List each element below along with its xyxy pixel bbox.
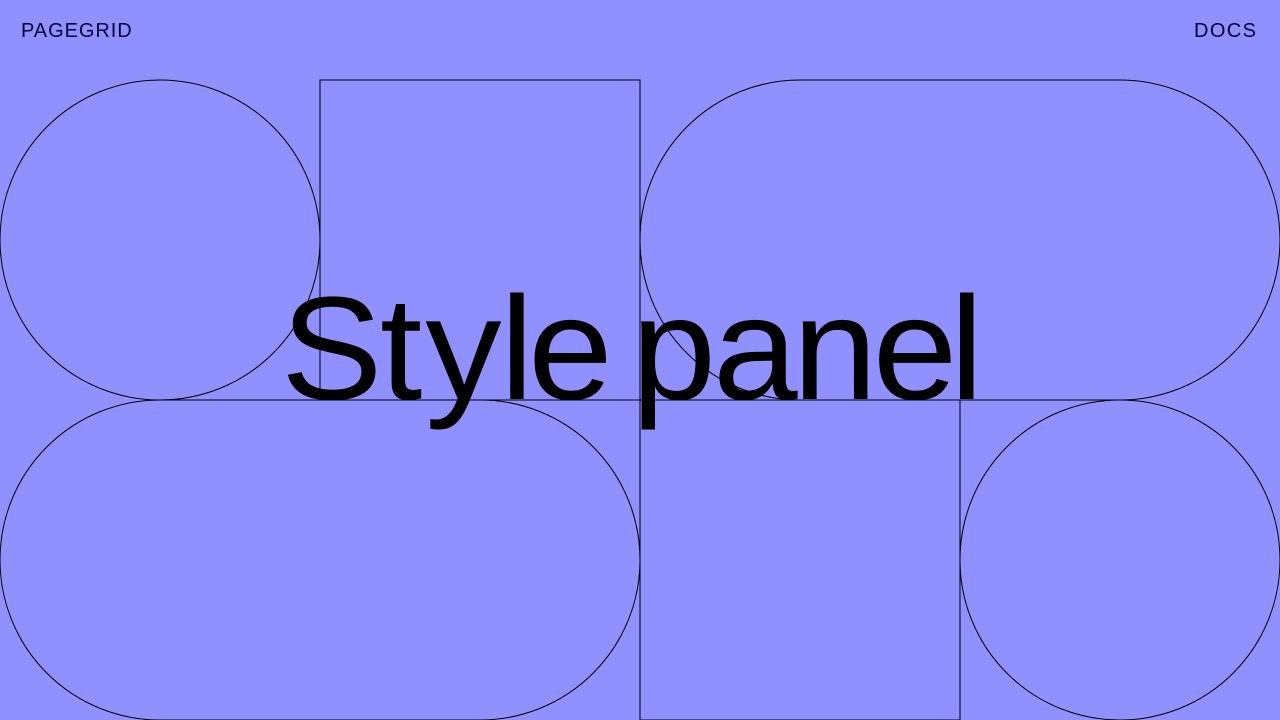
docs link: DOCS [1194, 20, 1257, 42]
circle top left [0, 80, 320, 400]
rectangle top middle [320, 80, 640, 400]
title: Style panel [281, 267, 984, 431]
rectangle bottom middle [640, 400, 960, 720]
pill bottom left [0, 400, 640, 720]
circle bottom right [960, 400, 1280, 720]
pill top right [640, 80, 1280, 400]
logo: PAGEGRID [21, 20, 133, 42]
